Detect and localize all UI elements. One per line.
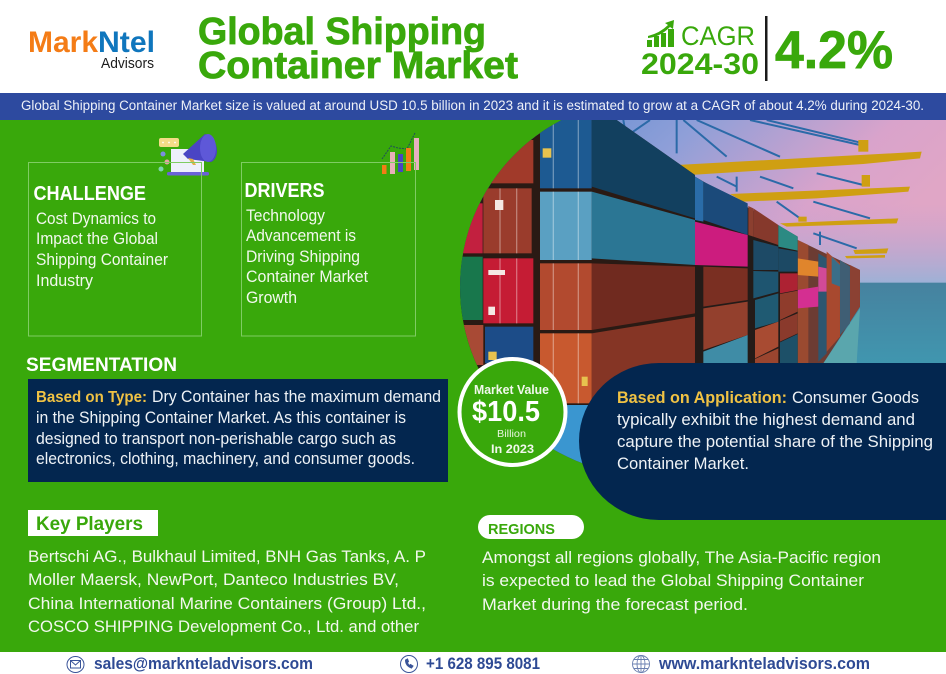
text: key players list: COSCO SHIPPING Development Co., Ltd. and other	[28, 618, 420, 636]
icon: globe	[632, 656, 650, 672]
text: regions description: Amongst all regions globally, The Asia-Pacific region	[482, 549, 881, 567]
heading: challenge: CHALLENGE	[34, 183, 146, 205]
heading: regions: REGIONS	[488, 521, 555, 538]
heading: segmentation: SEGMENTATION	[26, 355, 177, 376]
logo: MarkNtel Advisors	[28, 26, 155, 72]
title	[198, 11, 518, 87]
text: challenge description: Shipping Container	[36, 251, 169, 269]
badge: market value: In 2023	[491, 442, 534, 456]
header bar	[0, 0, 946, 93]
CAGR block: CAGR	[681, 21, 755, 51]
text: challenge description	[36, 210, 169, 290]
panel: based on application	[579, 363, 946, 520]
panel: based on type	[28, 379, 448, 482]
end faces	[540, 120, 592, 188]
panel: based on type: in the Shipping Container Market. As this container is	[36, 409, 406, 427]
text: drivers description: Advancement is	[246, 227, 356, 245]
text: key players list	[28, 548, 426, 636]
badge: market value: $10.5	[472, 396, 540, 428]
text: key players list: Bertschi AG., Bulkhaul Limited, BNH Gas Tanks, A. P	[28, 548, 426, 566]
text: drivers description: Growth	[246, 289, 297, 307]
icon: bar chart	[382, 133, 419, 174]
panel: based on application: typically exhibit the highest demand and	[617, 411, 915, 429]
panel: based on application: Container Market.	[617, 455, 749, 473]
photo: container ship and cranes	[450, 120, 946, 470]
summary band	[0, 93, 946, 120]
icon: phone	[400, 656, 418, 672]
CAGR block: 4.2%	[775, 21, 893, 80]
title: Container Market	[198, 45, 518, 87]
text: drivers description: Driving Shipping	[246, 248, 360, 266]
text: challenge description: Industry	[36, 272, 94, 290]
panel: based on type: Dry Container has the maximum demand	[152, 388, 441, 406]
text: website: www.marknteladvisors.com	[658, 654, 870, 673]
panel: based on application: Based on Application:	[617, 389, 787, 407]
text: challenge description: Cost Dynamics to	[36, 210, 156, 228]
main side faces	[592, 120, 695, 218]
title: Global Shipping	[198, 11, 486, 53]
badge: market value	[460, 359, 566, 465]
panel: based on type: designed to transport non-perishable cargo such as	[36, 430, 396, 448]
text: key players list: Moller Maersk, NewPort, Danteco Industries BV,	[28, 571, 399, 589]
panel: based on type: Based on Type:	[36, 389, 147, 406]
icon: email	[67, 656, 84, 672]
CAGR block	[641, 16, 893, 81]
text: drivers description	[246, 207, 368, 307]
far stacks	[450, 120, 695, 470]
text: drivers description: Technology	[246, 207, 326, 225]
badge: market value: Market Value	[474, 382, 549, 397]
badge: market value: Billion	[497, 429, 526, 440]
icon: growth chart	[647, 20, 674, 47]
logo: MarkNtel Advisors: Ntel	[98, 26, 155, 59]
panel: drivers	[242, 162, 416, 336]
heading: drivers: DRIVERS	[244, 180, 324, 202]
text: regions description: Market during the forecast period.	[482, 596, 748, 614]
footer bar	[0, 652, 946, 674]
side stacks	[695, 177, 798, 363]
text: drivers description: Container Market	[246, 268, 368, 286]
panel: challenge	[28, 162, 202, 336]
heading: regions	[478, 515, 584, 539]
text: regions description	[482, 549, 881, 614]
icon: megaphone and laptop	[158, 134, 217, 176]
panel: based on application: Consumer Goods	[792, 389, 919, 407]
text: regions description: is expected to lead the Global Shipping Container	[482, 572, 865, 590]
text: challenge description: Impact the Global	[36, 230, 158, 248]
panel: based on type: electronics, clothing, machinery, and consumer goods.	[36, 450, 415, 468]
CAGR block: 2024-30	[641, 48, 759, 81]
logo: MarkNtel Advisors: Advisors	[101, 55, 154, 72]
heading: key players: Key Players	[36, 513, 143, 535]
text: key players list: China International Marine Containers (Group) Ltd.,	[28, 595, 426, 613]
logo: MarkNtel Advisors: Mark	[28, 26, 98, 59]
text: phone: +1 628 895 8081	[426, 654, 540, 673]
text: email: sales@marknteladvisors.com	[94, 654, 313, 673]
panel: based on application: capture the potential share of the Shipping	[617, 433, 933, 451]
